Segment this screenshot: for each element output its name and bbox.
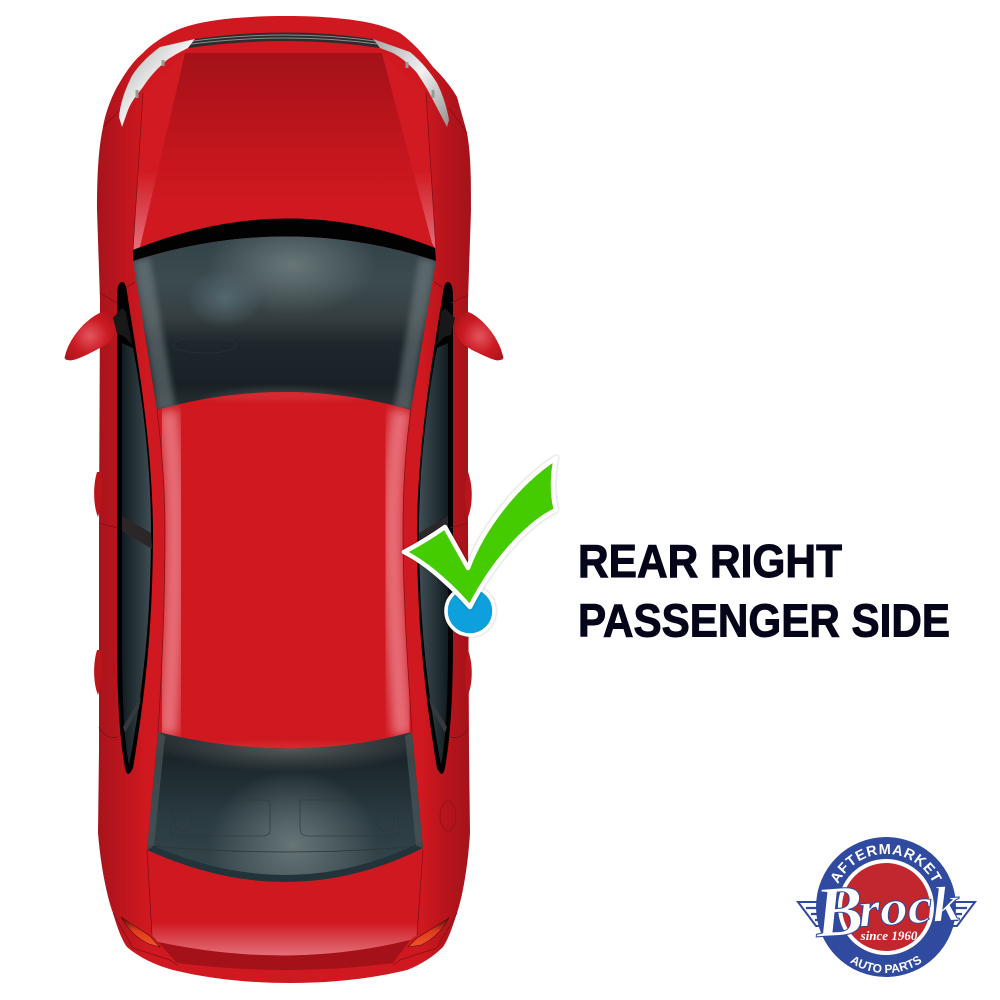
script letters: rock [856,875,962,938]
roof left highlight [168,410,175,735]
label text [578,535,950,646]
windshield wiper strip [133,218,436,261]
right headlight [373,39,449,127]
label line 2: PASSENGER SIDE [578,594,950,646]
roof right highlight [393,410,402,735]
left tail light [121,917,160,947]
left side window [117,282,153,774]
green tick [404,458,556,607]
right side window [417,282,453,774]
logo script wordmark [811,863,963,953]
trunk lid [147,850,423,956]
hood centre panel [140,53,432,247]
logo white ring [838,859,934,955]
logo blue ring [816,837,956,977]
right tail light [408,918,449,947]
door handles [94,472,102,517]
logo wings [798,902,975,926]
check mark [404,458,556,635]
script capital: B [811,870,866,953]
left headlight [119,39,195,127]
logo since line: since 1960 [860,928,918,943]
logo top text: AFTERMARKET [832,844,942,884]
car body [97,16,471,983]
fuel cap [440,801,456,831]
marker dot [446,587,494,635]
car illustration [65,16,503,983]
roof [157,392,411,748]
grille [188,32,380,48]
logo bottom text: AUTO PARTS [850,956,922,974]
right mirror [456,312,503,360]
right mirror mount [437,308,455,345]
left mirror mount [113,308,132,345]
windshield [133,236,436,410]
headlight detail marks [137,60,433,98]
roof outline [157,410,412,732]
roof rear highlight [220,742,350,748]
Brock logo [796,837,977,977]
left mirror [65,311,115,360]
hood right crease [382,53,436,250]
hood left crease [133,53,185,250]
rear bumper shade [158,940,410,970]
rear window [147,732,423,882]
hood [103,53,467,250]
door seam lines [99,282,468,738]
roof front highlight [208,392,360,401]
label line 1: REAR RIGHT [578,535,842,587]
logo red centre [842,863,930,951]
